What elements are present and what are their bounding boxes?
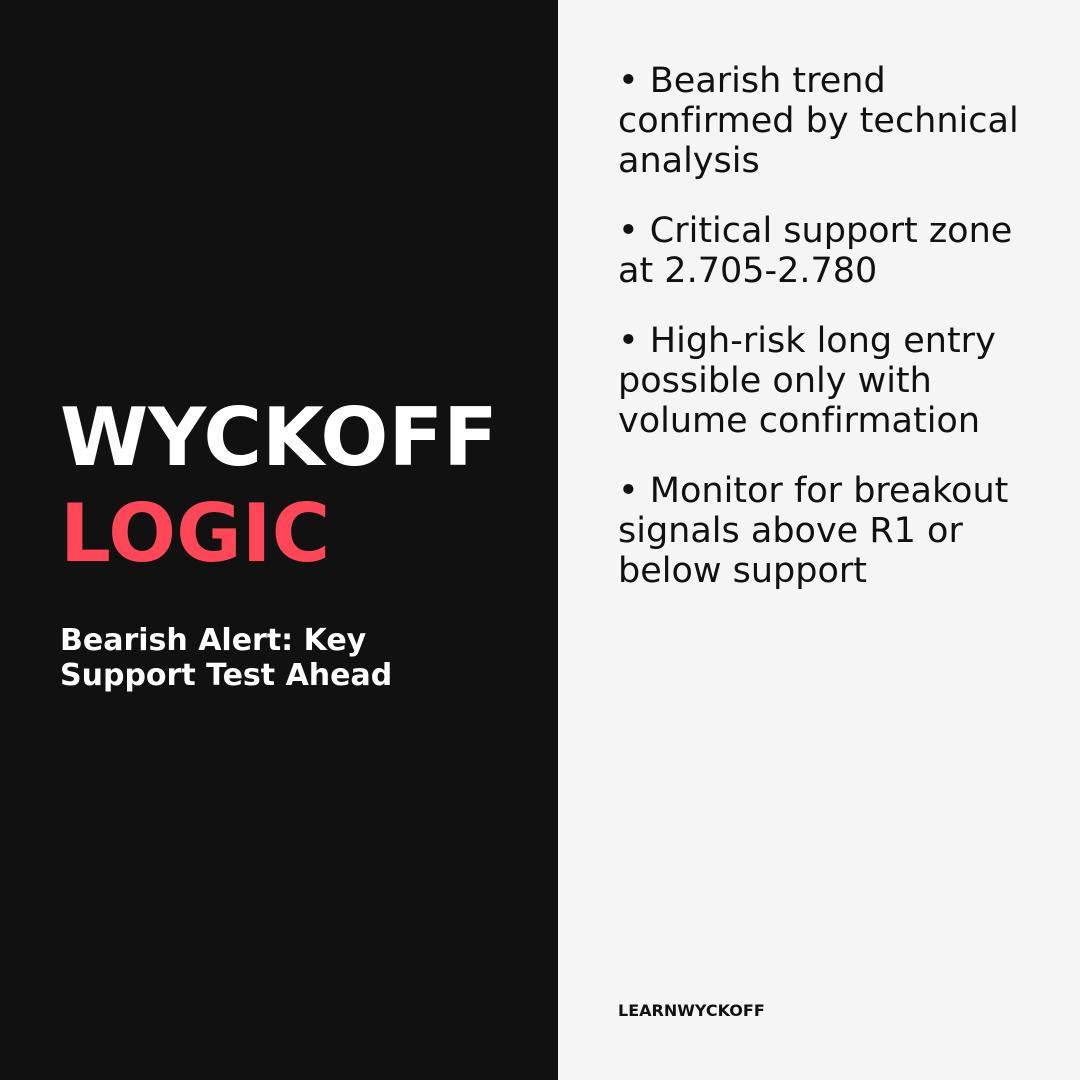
bullet: breakout signals: • Monitor for breakout <box>618 471 1008 511</box>
subtitle: Support Test Ahead <box>60 658 392 693</box>
bullet: bearish trend: • Bearish trend <box>618 61 886 101</box>
bullet: breakout signals: signals above R1 or <box>618 511 963 551</box>
bullet: support zone: at 2.705-2.780 <box>618 251 877 291</box>
bullet: bearish trend: analysis <box>618 141 760 181</box>
panel: left dark background <box>0 0 558 1080</box>
subtitle: Bearish Alert: Key <box>60 623 366 658</box>
bullet: breakout signals <box>618 471 1008 591</box>
bullet: long entry: volume confirmation <box>618 401 980 441</box>
bullet: long entry: • High-risk long entry <box>618 321 996 361</box>
bullet: bearish trend <box>618 61 1019 181</box>
bullet: support zone <box>618 211 1012 291</box>
bullet: bearish trend: confirmed by technical <box>618 101 1019 141</box>
title: WYCKOFF: WYCKOFF <box>60 391 498 484</box>
bullet: breakout signals: below support <box>618 551 867 591</box>
bullet: long entry: possible only with <box>618 361 932 401</box>
subtitle <box>60 623 392 693</box>
bullet: support zone: • Critical support zone <box>618 211 1012 251</box>
panel: right light background <box>558 0 1080 1080</box>
bullet: long entry <box>618 321 996 441</box>
footer brand: LEARNWYCKOFF <box>618 1001 765 1020</box>
title accent: LOGIC: LOGIC <box>60 487 330 580</box>
